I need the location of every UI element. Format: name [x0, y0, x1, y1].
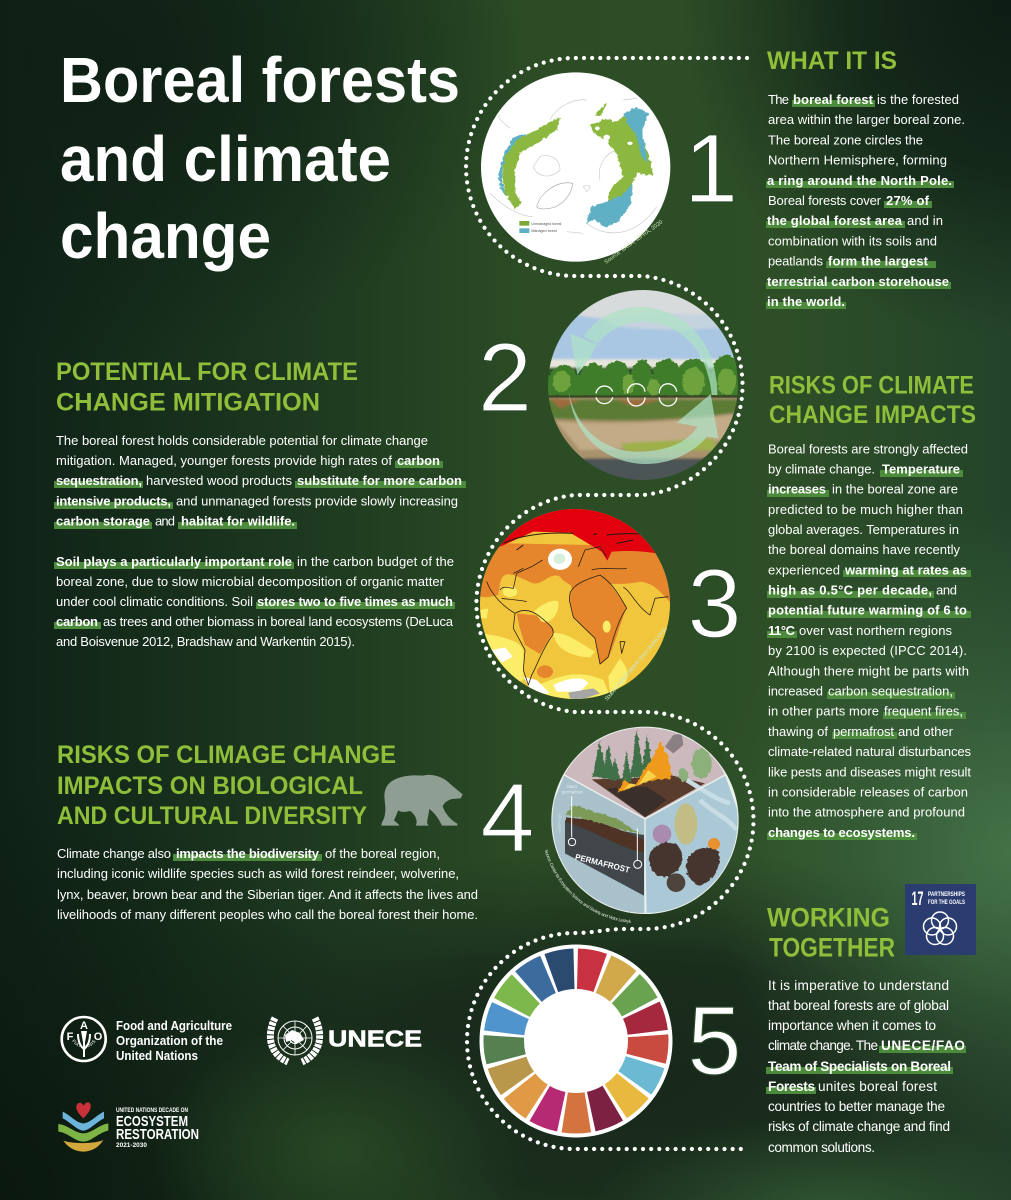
body: mitigation paragraph two: in the carbon budget of the: [297, 554, 454, 569]
heading: potential for climate change mitigation: POTENTIAL FOR CLIMATE: [56, 358, 358, 386]
cycle arrow: top: [570, 307, 717, 395]
body: risks of climate change impacts: Boreal forests are strongly affected: [768, 441, 968, 456]
body: mitigation paragraph one: mitigation. Managed, younger forests provide high rates of: [56, 453, 392, 468]
logo: FAO: United Nations: [116, 1048, 198, 1063]
body: risks of climate change impacts: in considerable releases of carbon: [768, 784, 968, 800]
SDG 17 badge: PARTNERSHIPS: [928, 891, 965, 898]
body: what it is: the global forest area: [767, 213, 903, 228]
triptych spokes: [564, 775, 725, 914]
body: working together: [766, 978, 966, 1155]
body: mitigation paragraph one: and unmanaged forests provide slowly increasing: [176, 494, 458, 508]
body: what it is: The boreal zone circles the: [768, 132, 923, 148]
small cycle arrows: [596, 384, 677, 406]
body: working together: UNECE/FAO: [881, 1038, 965, 1053]
logo: FAO: Food and Agriculture: [116, 1018, 232, 1033]
warming map: white cold patches: [492, 549, 588, 695]
permafrost source credit: Source: Center for Ecosystem Science and Society and Victor Leshyk: [544, 850, 631, 924]
body: risks of climate change impacts: permafrost: [833, 724, 894, 739]
number 2: 2: [478, 323, 532, 432]
body: diversity: livelihoods of many different peoples who call the boreal forest their home.: [57, 907, 478, 922]
heading: working together: [767, 902, 895, 962]
body: mitigation paragraph one: harvested wood products: [146, 473, 292, 488]
map legend: [519, 221, 561, 233]
body: working together: Forests: [768, 1079, 815, 1094]
logo: UN Decade on Ecosystem Restoration: UNITED NATIONS DECADE ON: [116, 1108, 188, 1114]
body: risks of climate change impacts: increased: [768, 684, 823, 698]
heading: risks of climate change impacts: RISKS OF CLIMATE: [769, 372, 974, 400]
logo: FAO: F: [67, 1031, 74, 1043]
SDG 17 badge: FOR THE GOALS: [928, 899, 965, 906]
logo: FAO: Organization of the: [116, 1033, 223, 1048]
body: risks of climate change impacts: by 2100 is expected (IPCC 2014).: [768, 643, 967, 658]
logo: UN Decade on Ecosystem Restoration: [58, 1102, 199, 1152]
dotted connector path: [466, 58, 754, 1149]
body: diversity: [57, 846, 478, 922]
body: diversity: including iconic wildlife species such as wild forest reindeer, wolverine,: [57, 866, 459, 881]
body: what it is: is the forested: [877, 92, 959, 107]
cycle arrow: bottom: [569, 392, 718, 464]
body: mitigation paragraph one: habitat for wildlife.: [181, 514, 295, 529]
circle 3: global warming map: [480, 509, 670, 699]
body: what it is: peatlands: [768, 254, 824, 268]
body: working together: unites boreal forest: [818, 1079, 937, 1094]
body: working together: importance when it comes to: [768, 1018, 936, 1033]
body: mitigation paragraph one: and: [155, 514, 175, 529]
warming map: red arctic: [499, 509, 656, 560]
body: what it is: a ring around the North Pole.: [767, 173, 952, 188]
heading: what it is: WHAT IT IS: [767, 47, 897, 75]
body: risks of climate change impacts: like pests and diseases might result: [768, 764, 971, 779]
body: risks of climate change impacts: Temperature: [882, 462, 960, 476]
body: mitigation paragraph two: boreal zone, due to slow microbial decomposition of organic matter: [56, 574, 445, 589]
circle 5: SDG colour wheel: [474, 939, 678, 1143]
body: mitigation paragraph one: carbon: [397, 453, 440, 468]
circle 4: permafrost triptych: [544, 726, 739, 924]
sector: permafrost soil block: PERMAFROST: [574, 852, 631, 875]
body: risks of climate change impacts: experienced: [768, 562, 840, 577]
body: what it is: boreal forest: [793, 92, 874, 107]
body: working together: countries to better manage the: [768, 1099, 945, 1114]
body: working together: common solutions.: [768, 1140, 875, 1155]
body: mitigation paragraph one: sequestration,: [56, 473, 142, 488]
body: what it is: Northern Hemisphere, forming: [768, 152, 947, 168]
sector: microbes and rock: [646, 775, 738, 913]
body: risks of climate change impacts: high as 0.5°C per decade,: [768, 582, 932, 598]
number 5: 5: [688, 986, 741, 1095]
panel: potential for climate change mitigation: [54, 358, 466, 649]
body: risks of climate change impacts: carbon sequestration,: [828, 684, 953, 698]
SDG 17 badge: 17: [912, 889, 924, 910]
body: what it is: combination with its soils and: [768, 234, 937, 248]
logo: FAO: [60, 1016, 232, 1063]
map: managed forest Eurasia: [587, 107, 648, 227]
sector: permafrost soil block: carbon age: [557, 813, 562, 833]
body: mitigation paragraph one: substitute for more carbon: [297, 473, 462, 488]
title: and climate: [60, 123, 391, 195]
body: what it is: in the world.: [767, 294, 845, 309]
logo: FAO: A: [80, 1020, 88, 1032]
logo: UN Decade on Ecosystem Restoration: RESTORATION: [116, 1126, 199, 1143]
body: working together: risks of climate change and find: [768, 1119, 950, 1134]
body: risks of climate change impacts: into the atmosphere and profound: [768, 805, 965, 820]
body: risks of climate change impacts: the boreal domains have recently: [768, 542, 960, 557]
title: Boreal forests: [60, 44, 460, 116]
body: diversity: Climate change also: [57, 846, 171, 861]
warming map: pale yellow regions: [480, 586, 627, 703]
body: what it is: [766, 92, 965, 309]
body: risks of climate change impacts: and: [936, 582, 957, 598]
body: working together: It is imperative to understand: [768, 978, 949, 993]
body: what it is: terrestrial carbon storehouse: [767, 274, 949, 289]
body: working together: Team of Specialists on Boreal: [768, 1059, 951, 1074]
sector: permafrost soil block: [552, 775, 644, 913]
panel: risks of climate change impacts: [767, 372, 976, 840]
body: what it is: area within the larger boreal zone.: [768, 112, 965, 127]
panel: working together: [766, 884, 976, 1155]
SDG 17 badge: [905, 884, 976, 955]
body: risks of climate change impacts: and other: [898, 724, 954, 739]
body: risks of climate change impacts: frequent fires,: [884, 704, 963, 719]
body: what it is: The: [768, 92, 789, 107]
heading: potential for climate change mitigation: [56, 358, 358, 417]
heading: risks to biological and cultural diversity: [57, 741, 396, 830]
body: mitigation paragraph one: carbon storage: [56, 514, 150, 529]
circle 2: forest photo with carbon cycle arrows: [543, 285, 743, 485]
map source credit: Source: IIASA, IBFRA, 2020: [604, 219, 664, 266]
body: mitigation paragraph one: intensive products,: [56, 494, 171, 508]
warming map: coastlines: [487, 547, 668, 685]
body: mitigation paragraph two: and Boisvenue 2012, Bradshaw and Warkentin 2015).: [56, 634, 355, 649]
body: diversity: lynx, beaver, brown bear and the Siberian tiger. And it affects the lives and: [57, 887, 478, 902]
body: what it is: form the largest: [828, 254, 929, 268]
body: mitigation paragraph one: The boreal forest holds considerable potential for climate change: [56, 433, 428, 448]
title: [60, 44, 460, 272]
heading: working together: TOGETHER: [769, 932, 895, 962]
heading: risks of climate change impacts: [769, 372, 976, 429]
body: diversity: of the boreal region,: [325, 846, 440, 861]
body: risks of climate change impacts: [767, 441, 972, 840]
sector: permafrost soil block: intact: [566, 784, 578, 789]
sector: burning forest: [564, 727, 725, 819]
logo: UN Decade on Ecosystem Restoration: 2021-2030: [116, 1142, 147, 1149]
body: mitigation paragraph two: carbon: [56, 614, 98, 629]
logo: UNECE: [270, 1018, 422, 1062]
body: what it is: and in: [907, 213, 943, 228]
body: risks of climate change impacts: thawing of: [768, 724, 828, 739]
body: risks of climate change impacts: over vast northern regions: [799, 623, 952, 638]
logo: FAO: FIAT PANIS: [72, 1039, 96, 1048]
map legend: Unmanaged forest: [531, 222, 561, 226]
body: working together: climate change. The: [768, 1038, 878, 1053]
body: mitigation paragraph two: under cool climatic conditions. Soil: [56, 594, 253, 609]
heading: risks to biological and cultural diversity: RISKS OF CLIMAGE CHANGE: [57, 741, 396, 769]
body: mitigation paragraph two: stores two to five times as much: [257, 594, 453, 609]
title: change: [60, 200, 271, 272]
photo: tree line: [543, 355, 743, 396]
logo: UN Decade on Ecosystem Restoration: ECOSYSTEM: [116, 1113, 188, 1130]
map: unmanaged forest Eurasia: [590, 103, 653, 207]
icon: bear: [381, 775, 463, 826]
sector: permafrost soil block: permafrost: [562, 789, 583, 794]
body: risks of climate change impacts: predicted to be much higher than: [768, 502, 963, 517]
body: risks of climate change impacts: in other parts more: [768, 704, 879, 719]
body: mitigation paragraph two: [54, 554, 455, 649]
body: risks of climate change impacts: increases: [768, 482, 826, 497]
climate map source credit: Source: Goddard Institute for Space Studies, NASA: [604, 626, 669, 702]
warming map: orange regions: [480, 543, 673, 665]
map legend: Managed forest: [531, 229, 557, 233]
body: working together: that boreal forests are of global: [768, 998, 949, 1013]
panel: what it is: [766, 47, 965, 309]
body: risks of climate change impacts: potential future warming of 6 to: [768, 603, 967, 618]
number 4: 4: [481, 763, 534, 872]
body: risks of climate change impacts: global averages. Temperatures in: [768, 522, 959, 537]
body: risks of climate change impacts: in the boreal zone are: [832, 482, 958, 497]
heading: potential for climate change mitigation: CHANGE MITIGATION: [56, 389, 320, 417]
logo: UNECE: UNECE: [328, 1026, 422, 1052]
body: mitigation paragraph two: Soil plays a particularly important role: [56, 554, 292, 569]
heading: risks to biological and cultural diversity: AND CULTURAL DIVERSITY: [57, 802, 367, 830]
body: mitigation paragraph two: as trees and other biomass in boreal land ecosystems (DeLuca: [103, 614, 454, 629]
heading: risks to biological and cultural diversity: IMPACTS ON BIOLOGICAL: [57, 772, 363, 800]
map: managed forest North America: [498, 133, 527, 197]
circle 1: boreal map: [481, 72, 670, 262]
body: risks of climate change impacts: warming at rates as: [844, 562, 967, 577]
body: what it is: Boreal forests cover: [768, 193, 882, 208]
body: risks of climate change impacts: 11°C: [768, 623, 796, 638]
body: mitigation paragraph one: [54, 433, 466, 529]
body: what it is: 27% of: [886, 193, 930, 208]
map: white gaps: [595, 126, 633, 167]
body: risks of climate change impacts: by climate change.: [768, 462, 875, 476]
body: risks of climate change impacts: climate-related natural disturbances: [768, 744, 972, 759]
number 3: 3: [688, 549, 741, 658]
body: risks of climate change impacts: changes to ecosystems.: [768, 825, 915, 840]
heading: working together: WORKING: [767, 902, 890, 932]
body: risks of climate change impacts: Although there might be parts with: [768, 663, 969, 678]
panel: risks to biological and cultural diversity: [57, 741, 478, 922]
number 1: 1: [684, 114, 738, 223]
logo: FAO: O: [94, 1031, 103, 1043]
map: unmanaged forest North America: [503, 118, 560, 209]
body: diversity: impacts the biodiversity: [176, 846, 320, 861]
heading: risks of climate change impacts: CHANGE IMPACTS: [769, 401, 976, 429]
